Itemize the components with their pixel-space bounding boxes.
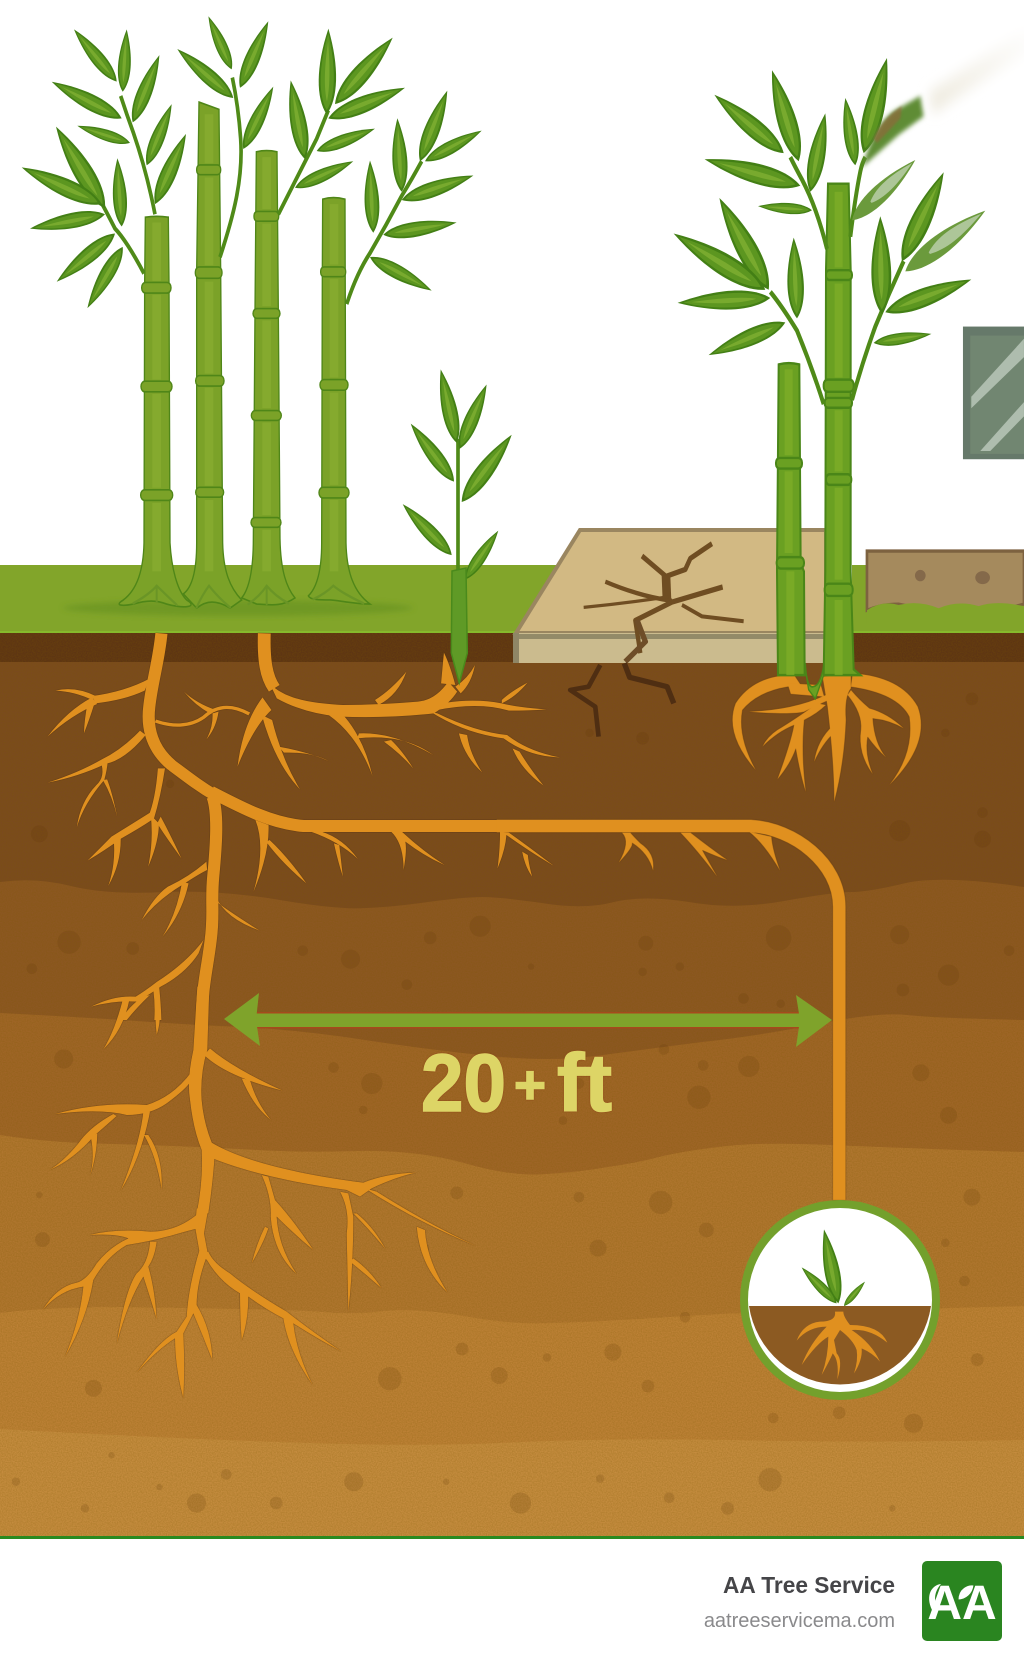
upper roots [47, 633, 571, 1023]
cane highlights [157, 114, 334, 571]
long runner to new shoot [497, 826, 839, 1200]
cane highlights [789, 192, 839, 675]
slab crack [584, 544, 744, 653]
distance label: ft [557, 1038, 612, 1129]
leaves: cane 3 [283, 28, 408, 194]
young bamboo shoot [398, 368, 519, 683]
bamboo cane 2 [183, 102, 242, 608]
tall cane [824, 184, 860, 675]
grove stems [100, 78, 458, 571]
smeared leaf streak [862, 24, 1024, 167]
soil cracks [570, 620, 674, 737]
bamboo grove [18, 14, 519, 683]
soil cross-section [0, 633, 1024, 1537]
cracked paving slab [513, 530, 827, 737]
shoot leaves [798, 1228, 867, 1308]
right stems [770, 157, 904, 404]
inset: new bamboo shoot [744, 1204, 936, 1396]
bamboo cane 3 [242, 151, 295, 605]
bamboo cane 4 [308, 198, 370, 604]
distance label: + [514, 1055, 546, 1115]
distance label [421, 1038, 612, 1129]
logo [922, 1561, 1002, 1641]
root collar [805, 663, 824, 699]
website: aatreeservicema.com [704, 1610, 895, 1632]
leaves: cane 1 [18, 25, 193, 312]
bamboo near house [668, 24, 1024, 699]
near-house bamboo roots [732, 673, 921, 802]
brand name: AA Tree Service [723, 1572, 895, 1598]
logo: AA [927, 1577, 997, 1630]
bamboo cane 1 [119, 216, 191, 607]
left lower leaves [668, 193, 805, 363]
leaves: cane 2 [172, 14, 280, 152]
root system: main runner and first rhizome [43, 633, 921, 1398]
right upper leaves [838, 56, 921, 227]
window [963, 327, 1024, 459]
footer divider [0, 1536, 1024, 1539]
shoot roots [797, 1312, 887, 1379]
soil spots [12, 693, 1014, 1515]
distance label: 20 [421, 1038, 506, 1129]
leaves: cane 4 [363, 88, 485, 297]
short cane [776, 363, 805, 675]
left upper leaves [702, 67, 833, 216]
lower roots [43, 987, 476, 1398]
grass strip [0, 565, 1024, 633]
retaining wall [867, 551, 1024, 625]
cane feet [133, 586, 363, 607]
right lower leaves [870, 168, 991, 349]
footer [0, 1539, 1024, 1666]
arrow: 20+ ft spread [224, 993, 832, 1047]
